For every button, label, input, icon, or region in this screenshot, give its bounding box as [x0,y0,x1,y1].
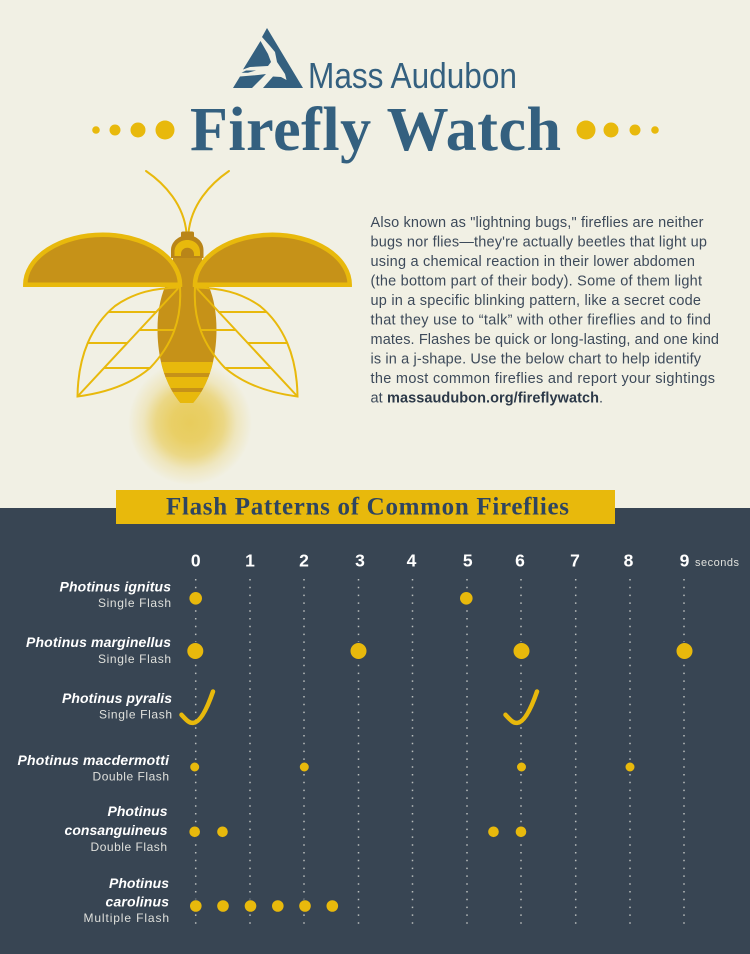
intro text: is in a j-shape. Use the below chart to help identify [370,352,702,368]
label: Photinus pyralis [62,690,172,722]
time axis labels: 7 [570,550,580,570]
time axis labels: 8 [624,550,634,570]
flash patterns [182,592,693,912]
flashes: Photinus pyralis j-shapes [182,692,537,723]
flashes: Photinus consanguineus [189,826,527,838]
flashes: Photinus macdermotti [190,762,635,772]
label: Photinus consanguineus [64,803,168,854]
species labels [18,578,172,925]
label: Photinus ignitus [60,578,171,610]
label: Photinus marginellus [26,634,171,666]
label: Photinus carolinus: Multiple Flash [84,911,169,925]
intro text: . [599,390,603,406]
intro text: bugs nor flies—they're actually beetles that light up [370,234,707,250]
logo wordmark: Mass Audubon [308,55,517,96]
left wing cover [25,235,180,285]
label: Photinus ignitus: Photinus ignitus [60,578,171,594]
chart heading banner: Flash Patterns of Common Fireflies [166,494,569,520]
label: Photinus consanguineus: consanguineus [64,822,168,838]
firefly glow [128,361,252,485]
time axis labels [191,550,739,570]
logo: Mass Audubon [233,28,517,96]
time axis labels: 5 [463,550,473,570]
flashes: Photinus carolinus [190,900,339,912]
label: Photinus carolinus: Photinus [109,875,169,891]
intro text: at [370,390,383,406]
label: Photinus macdermotti [18,752,170,784]
label: Photinus ignitus: Single Flash [98,596,171,610]
right hind wing [195,288,298,396]
firefly head [171,232,204,258]
intro text: (the bottom part of their body). Some of them light [370,274,702,290]
intro text: massaudubon.org/fireflywatch [387,390,599,406]
label: Photinus carolinus: carolinus [106,894,169,910]
label: Photinus marginellus: Single Flash [98,652,171,666]
label: Photinus pyralis: Photinus pyralis [62,690,172,706]
label: Photinus marginellus: Photinus marginellus [26,634,171,650]
illustration: firefly [25,171,350,485]
label: Photinus macdermotti: Photinus macdermotti [18,752,170,768]
chart gridlines [196,579,684,926]
intro text: the most common fireflies and report your sightings [370,371,715,387]
intro text: Also known as "lightning bugs," fireflies are neither [370,215,704,231]
time axis labels: 6 [515,550,525,570]
firefly body [158,258,216,403]
intro text: that they use to “talk” with other fireflies and to find [370,312,711,328]
decorative dots left of title [92,120,174,140]
icon: triangle with bird [233,28,303,88]
label: Photinus pyralis: Single Flash [99,708,172,722]
left hind wing [78,288,180,396]
time axis labels: 3 [355,550,365,570]
label: Photinus consanguineus: Double Flash [90,840,167,854]
time axis labels: 4 [407,550,417,570]
label: Photinus carolinus [84,875,169,925]
title: Firefly Watch [190,96,561,164]
time axis labels: 2 [299,550,309,570]
chart heading banner [116,490,615,524]
decorative dots right of title [576,120,659,140]
time axis labels: 9 [680,550,690,570]
label: Photinus consanguineus: Photinus [108,803,168,819]
intro text [370,215,719,406]
intro text: up in a specific blinking pattern, like a secret code [370,293,701,309]
antennae [146,171,229,233]
time axis labels: seconds [695,557,740,569]
time axis labels: 1 [245,550,255,570]
label: Photinus macdermotti: Double Flash [92,770,169,784]
flashes: Photinus marginellus [187,642,693,660]
flashes: Photinus ignitus [189,592,473,605]
intro text: mates. Flashes be quick or long-lasting, and one kind [370,332,719,348]
intro text: using a chemical reaction in their lower abdomen [370,254,695,270]
right wing cover [195,235,350,285]
time axis labels: 0 [191,550,201,570]
